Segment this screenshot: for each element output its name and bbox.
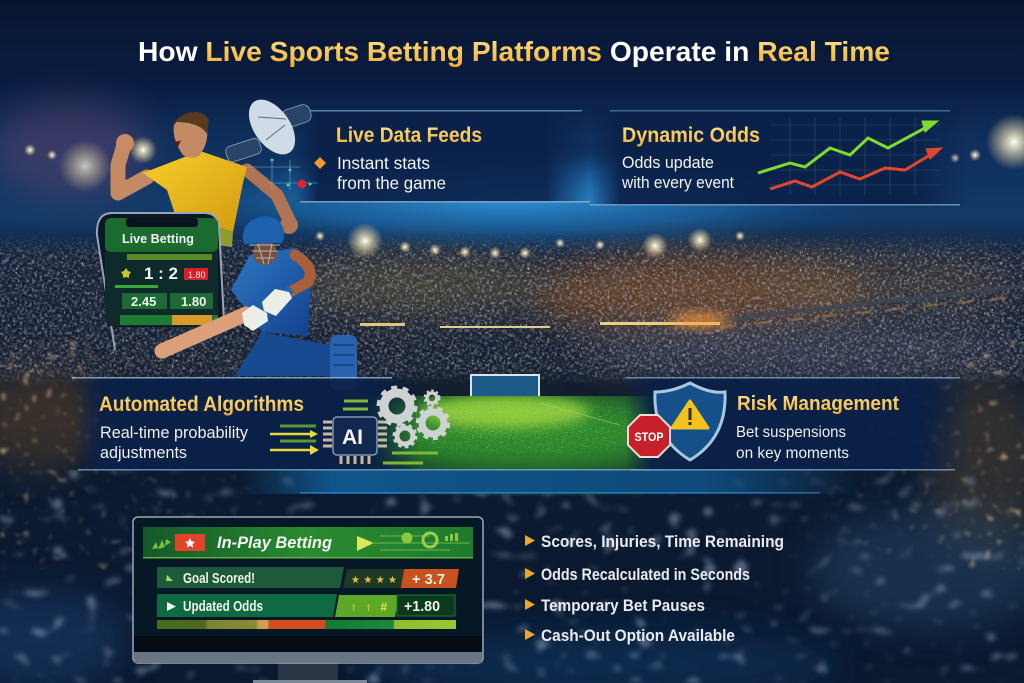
text: AI: AI xyxy=(342,426,363,449)
status bar xyxy=(157,620,456,629)
text: live betting: Live Betting xyxy=(122,231,194,246)
heading: risk management: Risk Management xyxy=(737,393,899,415)
heading: dynamic odds: Dynamic Odds xyxy=(622,124,760,147)
panel: live data feeds xyxy=(295,110,590,202)
panel: dynamic odds xyxy=(590,110,970,206)
icon: stop sign xyxy=(628,415,670,457)
heading: live data feeds: Live Data Feeds xyxy=(336,124,482,147)
text: +1.80: +1.80 xyxy=(404,599,440,615)
row: updated odds xyxy=(157,594,455,617)
goal xyxy=(471,375,539,396)
illustration: cricketer in blue xyxy=(162,216,357,390)
icon: stop sign: STOP xyxy=(634,432,664,444)
text: on key moments: on key moments xyxy=(736,445,849,462)
row: goal scored xyxy=(157,567,459,588)
pitch xyxy=(248,396,843,496)
panel: automated algorithms xyxy=(72,377,680,470)
button: 2.45: 2.45 xyxy=(131,294,156,309)
icon: shield with warning xyxy=(655,383,725,460)
text: adjustments: adjustments xyxy=(100,444,187,462)
row: updated odds: ↑ ↑ # xyxy=(351,600,387,614)
text: in-play betting: In-Play Betting xyxy=(217,533,333,552)
chart: odds lines xyxy=(758,118,942,195)
item: odds recalculated: Odds Recalculated in Seconds xyxy=(541,566,750,584)
heading: automated algorithms: Automated Algorithms xyxy=(99,393,304,416)
header bar xyxy=(143,527,473,558)
monitor: in-play betting xyxy=(133,517,483,683)
item: cash-out: Cash-Out Option Available xyxy=(541,627,735,645)
text: real-time probability: Real-time probability xyxy=(100,424,249,442)
text: bet suspensions: Bet suspensions xyxy=(736,424,846,441)
list: live betting features xyxy=(525,533,784,645)
title: How Live Sports Betting Platforms Operate in Real Time xyxy=(138,36,890,67)
text: odds update: Odds update xyxy=(622,154,714,172)
text: goal scored: Goal Scored! xyxy=(183,571,255,587)
panel: risk management xyxy=(625,377,970,470)
chip: red odds: 1.80 xyxy=(188,270,206,280)
bat xyxy=(162,314,246,351)
text: with every event: with every event xyxy=(621,174,734,192)
illustration: phone with live betting xyxy=(97,213,224,350)
icon: red flag xyxy=(175,534,205,551)
text: score: 1 : 2 xyxy=(144,264,178,283)
icon: ai chip with data arrows xyxy=(270,401,438,464)
text: +3.7: + 3.7 xyxy=(412,572,445,588)
icon: satellite dish and data network xyxy=(224,91,326,190)
icon: gears xyxy=(378,388,448,447)
button: 1.80: 1.80 xyxy=(181,294,206,309)
text: instant stats: Instant stats xyxy=(337,153,430,173)
text: from the game: from the game xyxy=(337,173,446,193)
item: bet pauses: Temporary Bet Pauses xyxy=(541,597,705,615)
row: goal scored: ★★★★ xyxy=(351,575,397,586)
text: updated odds: Updated Odds xyxy=(183,599,263,615)
item: scores: Scores, Injuries, Time Remaining xyxy=(541,533,784,551)
illustration: footballer in yellow xyxy=(116,112,298,247)
floodlights xyxy=(24,114,1024,328)
